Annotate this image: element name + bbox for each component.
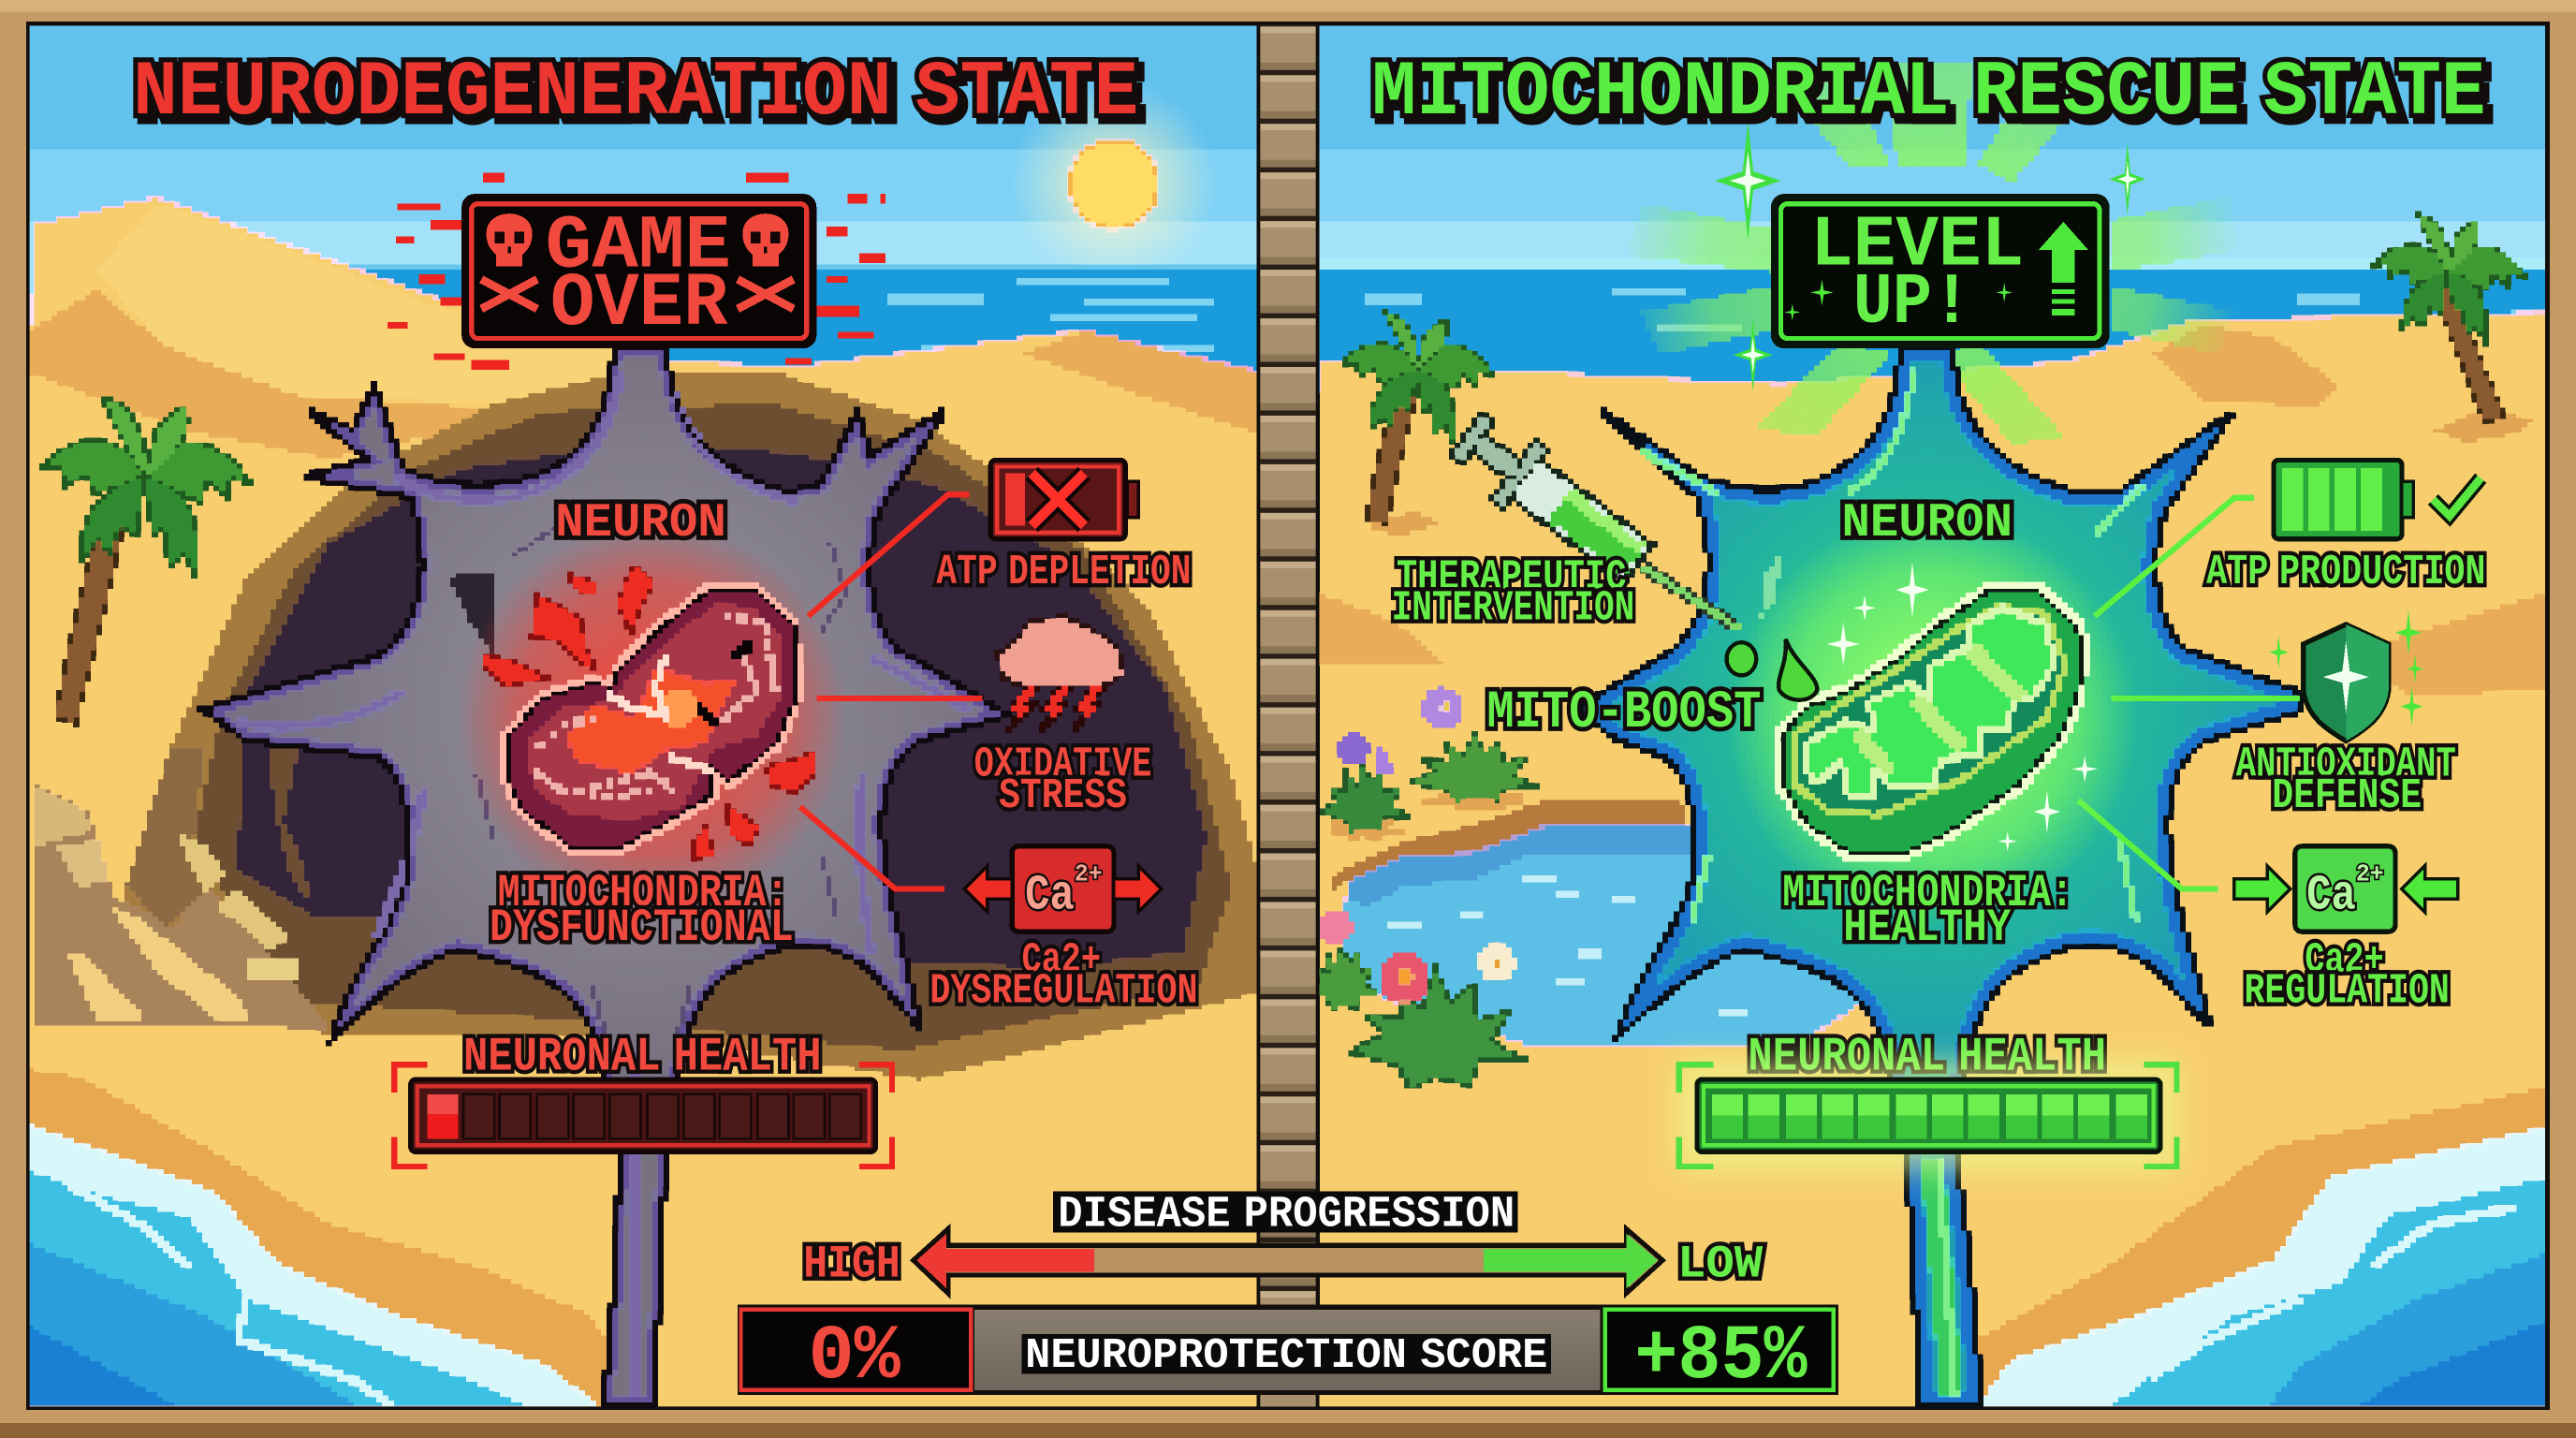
- icon: full battery and check: [2274, 460, 2481, 539]
- icon: calcium regulation: Ca: [2306, 868, 2356, 924]
- score label: NEUROPROTECTION SCORE: [1025, 1331, 1547, 1380]
- callout lines left: [800, 494, 983, 889]
- icon: calcium regulation: 2+: [2356, 860, 2384, 888]
- label: mitochondria healthy: MITOCHONDRIA:: [1782, 867, 2073, 919]
- label: mitochondria dysfunctional: MITOCHONDRIA:: [498, 867, 788, 919]
- score: zero percent: 0%: [809, 1313, 900, 1401]
- label: ca2+ regulation: [2244, 935, 2450, 1016]
- heading: neurodegeneration state: NEURODEGENERATION STATE: [133, 49, 1138, 137]
- heading: mitochondrial rescue state: MITOCHONDRIAL RESCUE STATE: [1372, 49, 2485, 137]
- label: antioxidant defense: [2236, 740, 2456, 820]
- mitochondrion: healthy: [1727, 513, 2137, 923]
- panel: neurodegeneration scene background: [30, 24, 1258, 1438]
- label: oxidative stress: STRESS: [999, 771, 1127, 820]
- label: therapeutic intervention: INTERVENTION: [1392, 584, 1634, 633]
- sign: game over: [465, 198, 813, 347]
- label: antioxidant defense: ANTIOXIDANT: [2236, 740, 2456, 788]
- score panel: [738, 1305, 1838, 1401]
- label: mito-boost: MITO-BOOST: [1486, 682, 1761, 742]
- red glitch fragments around game over sign: [388, 172, 886, 370]
- label: ca2+ dysregulation: [929, 935, 1197, 1016]
- icon: calcium dysregulation: 2+: [1075, 860, 1103, 888]
- label: atp production: ATP PRODUCTION: [2206, 548, 2485, 596]
- neuron: degenerating cell body: [205, 348, 1005, 1405]
- label: mitochondria healthy: [1782, 867, 2073, 954]
- heading: mitochondrial rescue state: MITOCHONDRIAL RESCUE STATE: [1377, 53, 2491, 141]
- icon: antioxidant shield: [2269, 609, 2423, 741]
- palm tree rescue panel right: [2375, 214, 2525, 420]
- health bar: full: [1676, 1060, 2178, 1171]
- score label: [974, 1310, 1600, 1390]
- sign: level up: LEVEL: [1810, 206, 2024, 287]
- panel: mitochondrial rescue scene background: [1318, 24, 2546, 1438]
- label: atp depletion: ATP DEPLETION: [936, 548, 1191, 596]
- label: therapeutic intervention: THERAPEUTIC: [1397, 552, 1627, 601]
- red debris fragments: [483, 565, 815, 858]
- label: ca2+ regulation: Ca2+: [2305, 935, 2384, 984]
- health bar: nearly empty: [394, 1064, 892, 1167]
- heading: neurodegeneration state: NEURODEGENERATION STATE: [138, 53, 1144, 141]
- label: neuronal health right: NEURONAL HEALTH: [1748, 1032, 2106, 1085]
- palm tree rescue panel left: [1343, 313, 1493, 522]
- sparkles around healthy mitochondrion: [1827, 562, 2098, 851]
- label: neuron right: NEURON: [1841, 497, 2012, 550]
- label: mitochondria dysfunctional: [490, 867, 794, 954]
- mitochondrion: dysfunctional and broken: [459, 524, 846, 912]
- label: ca2+ dysregulation: DYSREGULATION: [929, 967, 1197, 1016]
- arrow: disease progression: [914, 1229, 1662, 1293]
- green light rays behind level up: [1627, 66, 2250, 444]
- label: oxidative stress: [974, 740, 1151, 820]
- label: therapeutic intervention: [1392, 552, 1634, 633]
- label: mitochondria healthy: HEALTHY: [1843, 902, 2012, 954]
- score: zero percent: [741, 1310, 971, 1401]
- label: ca2+ dysregulation: Ca2+: [1022, 935, 1101, 984]
- label: neuronal health left: NEURONAL HEALTH: [463, 1032, 822, 1085]
- sign: game over: GAME: [546, 204, 731, 289]
- neuron: healthy cell body: [1577, 348, 2300, 1405]
- sign: level up: UP!: [1853, 263, 1971, 345]
- icon: depleted battery: [990, 460, 1138, 539]
- icon: calcium dysregulation: [964, 846, 1162, 932]
- sign: level up: [1775, 198, 2106, 345]
- label: oxidative stress: OXIDATIVE: [974, 740, 1151, 788]
- flowers and plants: [1308, 688, 1536, 1088]
- sign: game over: OVER: [550, 262, 728, 347]
- callout lines right: [2078, 498, 2300, 889]
- sparkles around level up sign: [1715, 122, 2145, 391]
- icon: calcium regulation: [2234, 846, 2458, 932]
- label: disease progression: DISEASE PROGRESSION: [1058, 1190, 1515, 1240]
- icon: storm cloud: [999, 618, 1123, 733]
- icon: green drops: [1727, 639, 1817, 700]
- icon: syringe: [1445, 405, 1738, 627]
- label: ca2+ regulation: REGULATION: [2244, 967, 2450, 1016]
- label: antioxidant defense: DEFENSE: [2272, 771, 2422, 820]
- palm tree left panel: [43, 398, 252, 723]
- center stone wall: [1257, 24, 1319, 1406]
- icon: calcium dysregulation: Ca: [1025, 868, 1075, 924]
- label: high: HIGH: [803, 1239, 900, 1291]
- label: low: LOW: [1677, 1239, 1764, 1291]
- label: mitochondria dysfunctional: DYSFUNCTIONAL: [490, 902, 794, 954]
- label: neuron left: NEURON: [555, 497, 726, 550]
- score: plus 85 percent: +85%: [1634, 1313, 1808, 1401]
